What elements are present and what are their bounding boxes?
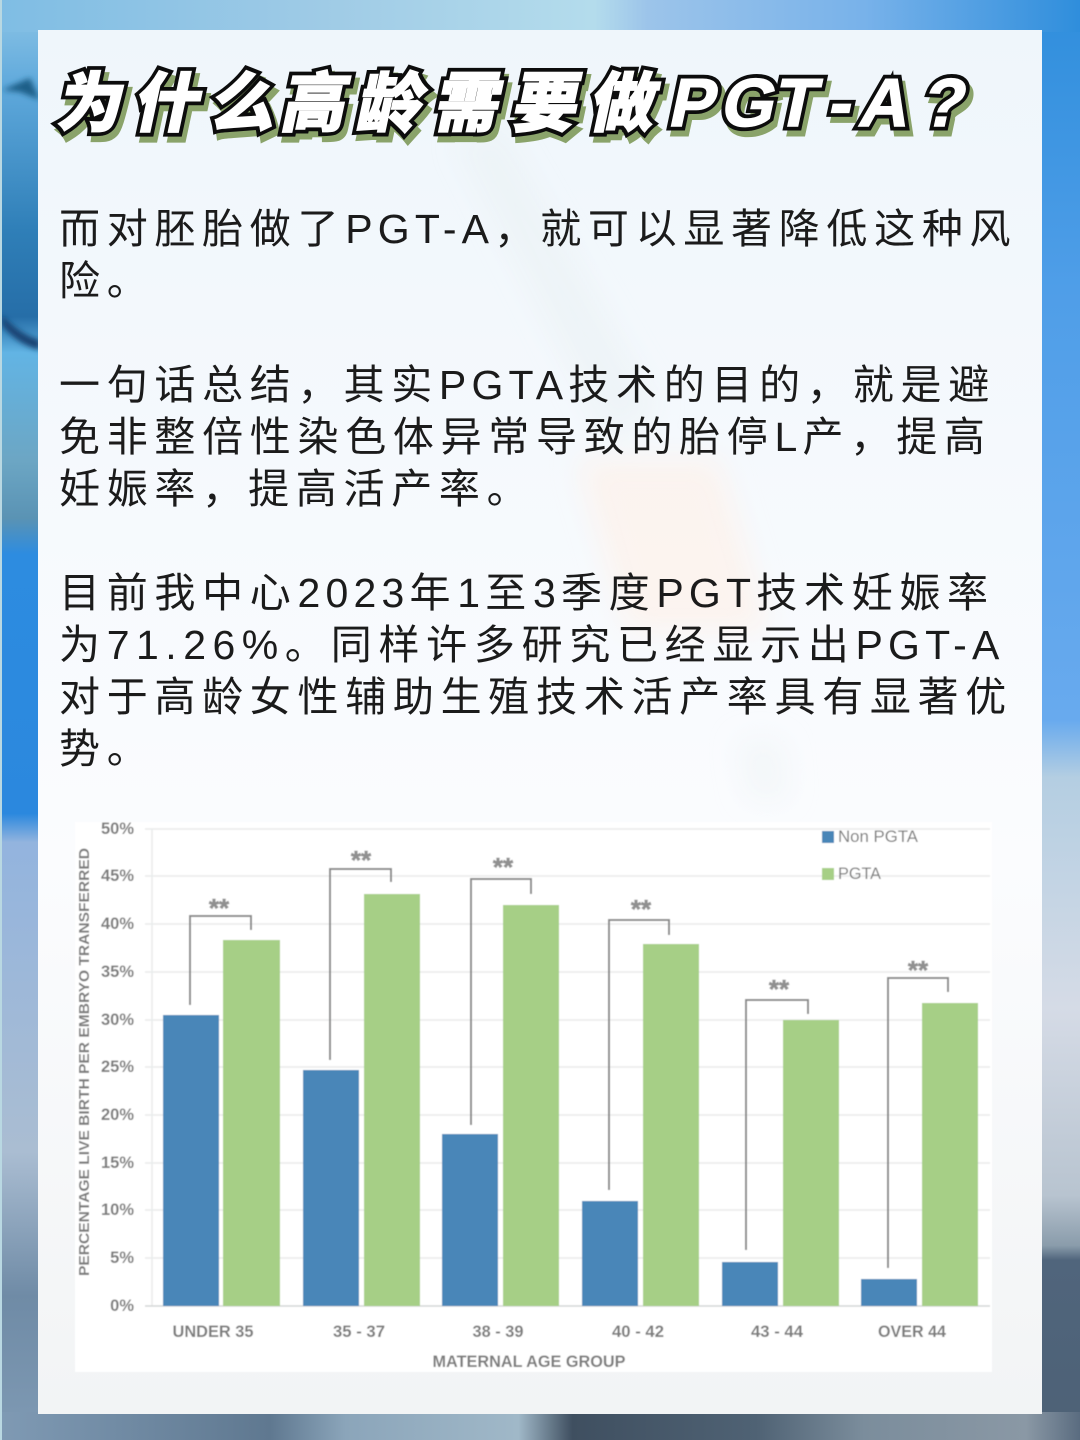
legend: Non PGTA [838,827,919,846]
significance stars: ** [209,893,230,923]
green bars: PGTA [223,894,978,1306]
gridlines [145,829,990,1306]
y-axis tick labels: 25% [101,1058,134,1076]
paragraph 3: 为71.26%。同样许多研究已经显示出PGT-A [59,622,1004,668]
y-axis tick labels: 50% [101,820,134,838]
y-axis tick labels: 20% [101,1106,134,1124]
significance stars [209,845,929,1004]
paragraph 2: 妊娠率，提高活产率。 [59,466,533,512]
y-axis tick labels: 45% [101,867,134,885]
legend [822,827,919,883]
x-axis category labels: OVER 44 [878,1322,947,1341]
title: PGT-A? [664,65,975,141]
significance brackets [190,869,948,1268]
x-axis category labels [172,1322,947,1341]
blue bars: Non PGTA [163,1015,917,1306]
x-axis title: MATERNAL AGE GROUP [432,1352,626,1371]
y-axis tick labels: 5% [110,1249,134,1267]
chart background [75,822,992,1372]
significance stars: ** [908,955,929,985]
paragraph 2: 一句话总结，其实PGTA技术的目的，就是避 [59,362,996,408]
significance stars: ** [493,852,514,882]
significance stars: ** [769,974,790,1004]
title: PGT-A? [668,71,978,147]
y-axis tick labels: 15% [101,1154,134,1172]
x-axis category labels: 35 - 37 [333,1322,385,1341]
x-axis category labels: 40 - 42 [612,1322,664,1341]
y-axis tick labels: 30% [101,1011,134,1029]
title: 为什么高龄需要做 [52,67,666,140]
y-axis tick labels: 35% [101,963,134,981]
title: 为什么高龄需要做 [52,67,666,140]
paragraph 3 [59,570,1013,772]
significance stars: ** [351,845,372,875]
paragraph 1: 险。 [59,258,153,304]
paragraph 2 [59,362,996,512]
x-axis category labels: 43 - 44 [751,1322,804,1341]
x-axis category labels: 38 - 39 [472,1322,524,1341]
y-axis title: PERCENTAGE LIVE BIRTH PER EMBRYO TRANSFERRED [76,848,93,1276]
y-axis tick labels [101,820,134,1315]
paragraph 3: 势。 [59,726,153,772]
title: 为什么高龄需要做 [56,73,669,146]
title [50,64,978,147]
x-axis category labels: UNDER 35 [172,1322,254,1341]
y-axis tick labels: 0% [110,1297,134,1315]
significance stars: ** [631,894,652,924]
paragraph 3: 目前我中心2023年1至3季度PGT技术妊娠率 [59,570,995,616]
y-axis tick labels: 10% [101,1201,134,1219]
paragraph 2: 免非整倍性染色体异常导致的胎停L产，提高 [59,414,992,460]
paragraph 3: 对于高龄女性辅助生殖技术活产率具有显著优 [59,674,1013,720]
paragraph 1 [59,206,1017,304]
legend: PGTA [838,864,882,883]
paragraph 1: 而对胚胎做了PGT-A，就可以显著降低这种风 [59,206,1017,252]
y-axis tick labels: 40% [101,915,134,933]
title: PGT-A? [664,65,975,141]
